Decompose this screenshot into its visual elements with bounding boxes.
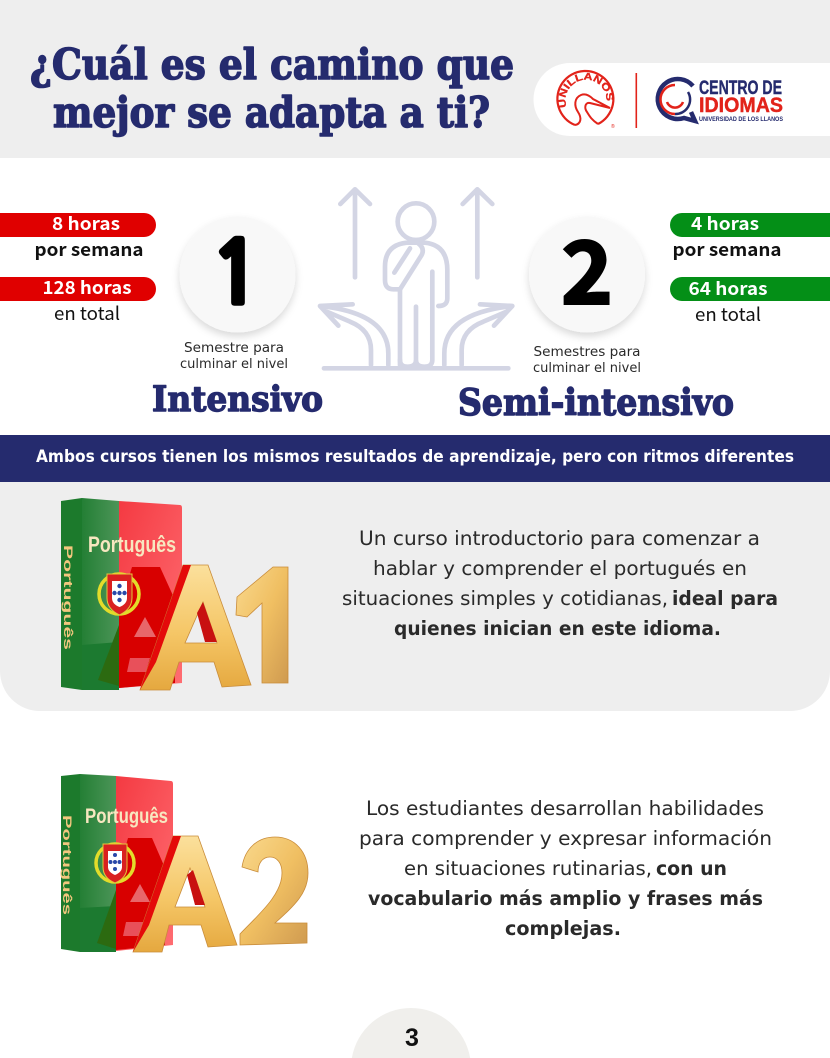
text: A1 description: ideal para bbox=[672, 587, 778, 610]
panel: semi-intensivo hours bbox=[670, 210, 830, 327]
caption: semestre: Semestre para bbox=[184, 341, 284, 356]
panel: intensivo hours: en total bbox=[54, 300, 120, 326]
text: A2 description: vocabulario más amplio y frases más bbox=[368, 887, 763, 910]
title bbox=[30, 40, 514, 137]
text: A1 description: quienes inician en este idioma. bbox=[394, 617, 721, 640]
text: A1 description bbox=[342, 527, 778, 640]
logo: Centro de Idiomas: UNIVERSIDAD DE LOS LLANOS bbox=[699, 116, 784, 123]
icon: Portuguese book A1: Português bbox=[88, 532, 176, 557]
logo pill bbox=[534, 63, 830, 136]
text: A2 description: en situaciones rutinarias, bbox=[404, 857, 652, 880]
page number bbox=[352, 1008, 470, 1058]
logo: Unillanos bbox=[556, 70, 615, 130]
panel: semi-intensivo hours: en total bbox=[695, 301, 761, 327]
panel: semi-intensivo hours: 64 horas bbox=[688, 275, 768, 301]
text: A1 description: hablar y comprender el portugués en bbox=[373, 557, 747, 580]
heading: Semi-intensivo: Semi-intensivo bbox=[458, 382, 734, 424]
icon: Portuguese book A1 bbox=[61, 498, 288, 690]
text: A1 description: Un curso introductorio para comenzar a bbox=[359, 527, 760, 550]
text: A2 description bbox=[359, 797, 772, 940]
logo: Centro de Idiomas: IDIOMAS bbox=[699, 94, 783, 117]
caption: semestre: culminar el nivel bbox=[180, 357, 288, 372]
title: ¿Cuál es el camino que bbox=[30, 40, 514, 89]
caption: semestre bbox=[180, 341, 288, 372]
number badge 2 bbox=[529, 202, 645, 332]
divider bbox=[636, 73, 637, 128]
icon: Portuguese book A1: Português bbox=[61, 545, 75, 651]
logo: Unillanos: ® bbox=[611, 123, 615, 130]
text: A2 description: complejas. bbox=[505, 917, 621, 940]
banner bbox=[0, 435, 830, 482]
text: A2 description: con un bbox=[656, 857, 727, 880]
text: A2 description: para comprender y expresar información bbox=[359, 827, 772, 850]
heading: Intensivo: Intensivo bbox=[152, 379, 323, 420]
logo: Unillanos: UNILLANOS bbox=[558, 72, 612, 108]
icon: Portuguese book A2: Português bbox=[85, 805, 168, 828]
number badge 1: 1 bbox=[210, 231, 262, 316]
panel: semi-intensivo hours: por semana bbox=[672, 236, 782, 262]
panel: intensivo hours: 8 horas bbox=[52, 210, 120, 236]
icon: person choosing paths bbox=[320, 189, 512, 368]
logo: Centro de Idiomas bbox=[658, 77, 784, 123]
header band bbox=[0, 0, 830, 158]
number badge 2: 2 bbox=[560, 202, 614, 331]
logo: Centro de Idiomas: CENTRO DE bbox=[699, 77, 782, 99]
panel: intensivo hours: 128 horas bbox=[42, 274, 132, 300]
page number: 3 bbox=[405, 1024, 419, 1052]
caption: semestres: Semestres para bbox=[534, 345, 640, 360]
icon: Portuguese book A2 bbox=[60, 774, 308, 952]
icon: Portuguese book A2: Português bbox=[60, 815, 74, 916]
number badge 1 bbox=[180, 216, 296, 332]
panel: A1 background bbox=[0, 482, 830, 711]
caption: semestres: culminar el nivel bbox=[533, 361, 641, 376]
title: mejor se adapta a ti? bbox=[53, 88, 490, 137]
text: A2 description: Los estudiantes desarrollan habilidades bbox=[366, 797, 764, 820]
caption: semestres bbox=[533, 345, 641, 376]
panel: intensivo hours: por semana bbox=[34, 236, 144, 262]
text: A1 description: situaciones simples y cotidianas, bbox=[342, 587, 668, 610]
panel: semi-intensivo hours: 4 horas bbox=[691, 210, 759, 236]
panel: intensivo hours bbox=[0, 210, 156, 326]
